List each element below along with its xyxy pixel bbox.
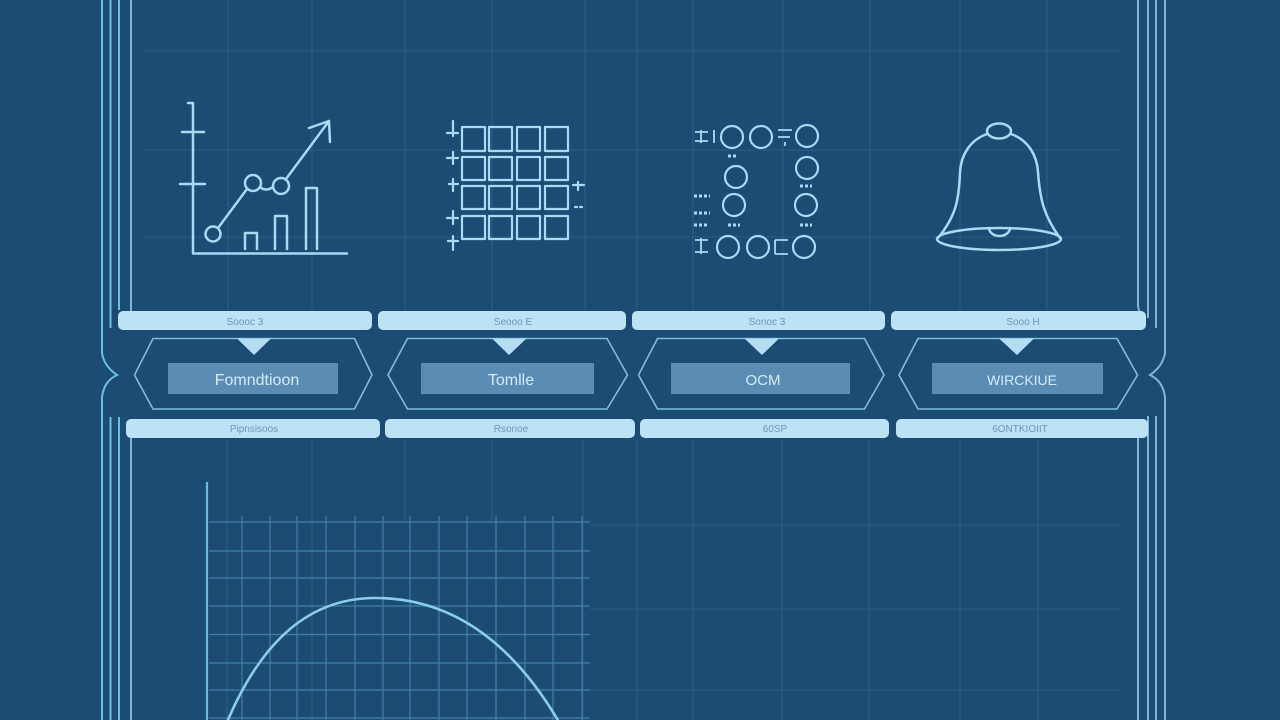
right frame lines bbox=[1138, 0, 1165, 720]
hexagon: Foundation bbox=[134, 338, 372, 409]
pill: step 4 bbox=[891, 311, 1146, 330]
icon: line and bar growth chart bbox=[180, 103, 347, 254]
hexagon: OCM bbox=[638, 338, 884, 409]
pill: label 1: Pipnsisoos bbox=[230, 424, 278, 435]
pill: label 3 bbox=[640, 419, 889, 438]
pill: step 2: Seooo E bbox=[494, 317, 533, 328]
pill: label 2 bbox=[385, 419, 635, 438]
bottom label pills bbox=[126, 419, 1148, 438]
icon: bell bbox=[937, 124, 1061, 250]
pill: step 2 bbox=[378, 311, 626, 330]
pill: label 1 bbox=[126, 419, 380, 438]
pill: label 2: Rsonoe bbox=[494, 424, 529, 435]
pill: step 1 bbox=[118, 311, 372, 330]
icon: ring of circles bbox=[694, 125, 818, 258]
pill: label 4 bbox=[896, 419, 1148, 438]
pill: label 4: 6ONTKIOIIT bbox=[992, 424, 1048, 435]
chart: arc on grid bbox=[207, 482, 590, 720]
left frame lines bbox=[102, 0, 131, 720]
hexagon: OCM: OCM bbox=[746, 372, 780, 389]
pill: step 3: Sonoc 3 bbox=[749, 317, 786, 328]
hexagon: Table: Tomlle bbox=[488, 372, 534, 389]
hexagon: Wireframe bbox=[899, 338, 1138, 409]
pill: step 3 bbox=[632, 311, 885, 330]
pill: step 4: Sooo H bbox=[1006, 317, 1040, 328]
top label pills bbox=[118, 311, 1146, 330]
hexagon: Wireframe: WIRCKIUE bbox=[987, 372, 1057, 388]
hexagon: Foundation: Fomndtioon bbox=[215, 372, 299, 389]
hexagon: Table bbox=[388, 338, 628, 409]
pill: step 1: Soooc 3 bbox=[227, 317, 264, 328]
icon: table grid bbox=[447, 121, 584, 250]
pill: label 3: 60SP bbox=[763, 424, 788, 435]
